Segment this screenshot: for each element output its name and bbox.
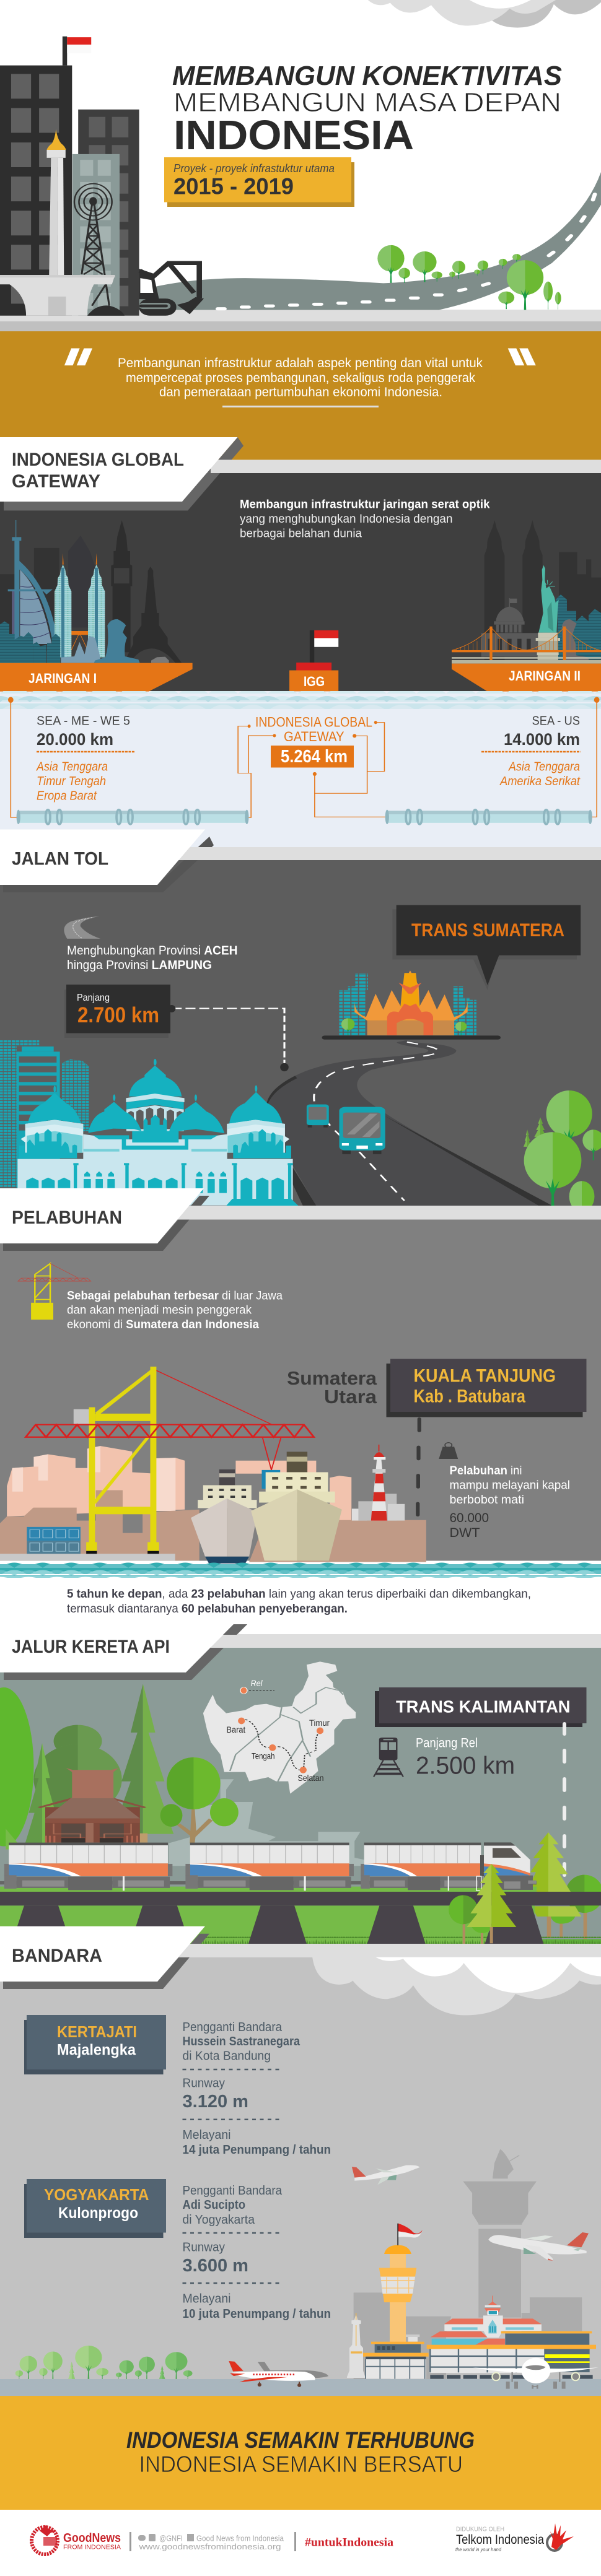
illustration: toll road (266, 1040, 552, 1206)
text: description: Membangun infrastruktur jaringan serat optik (240, 498, 490, 511)
illustration: right skyline (452, 520, 601, 692)
social links: www.goodnewsfromindonesia.org (138, 2542, 281, 2551)
text: SEA-US: SEA - US (532, 715, 580, 728)
panel: Jalur Kereta Api (0, 1616, 601, 1944)
stat box: length (64, 985, 170, 1038)
illustration: undersea pipes (17, 809, 592, 824)
subtitle badge (164, 157, 354, 207)
icon: open quote (64, 349, 92, 365)
connector: dashed line to road (168, 1005, 289, 1071)
logo: GoodNews from Indonesia: FROM INDONESIA (63, 2544, 121, 2551)
text: SEA-US: Amerika Serikat (499, 775, 581, 788)
text: SEA-US: 14.000 km (504, 730, 580, 749)
illustration: plane taking off (488, 2232, 589, 2261)
text: Indonesia Global Gateway length: GATEWAY (284, 729, 344, 744)
connector: white dashes (563, 1724, 566, 1875)
illustration: Baiturrahman mosque (0, 1040, 299, 1206)
panel: Indonesia Global Gateway (0, 437, 601, 847)
illustration: excavator (139, 263, 204, 316)
text: Yogyakarta details: Pengganti Bandara (182, 2184, 283, 2198)
divider (129, 2532, 131, 2551)
heading tab: Pelabuhan (0, 1188, 204, 1243)
info box: Yogyakarta (24, 2179, 166, 2238)
illustration: foreground trees (449, 1864, 516, 1944)
illustration: sea surface (0, 691, 601, 709)
illustration: trees (377, 245, 561, 310)
stat box: length: Panjang (77, 993, 110, 1003)
text: SEA-ME-WE 5: Asia Tenggara (36, 760, 108, 774)
label: Jaringan I: JARINGAN I (29, 671, 97, 686)
label: Jaringan II: JARINGAN II (509, 668, 581, 684)
heading tab: Indonesia Global Gateway: GATEWAY (12, 471, 100, 492)
label: Sumatera Utara (287, 1367, 377, 1408)
title: INDONESIA (173, 112, 414, 159)
callout: Kuala Tanjung (387, 1359, 586, 1417)
text: Kertajati details: Runway (182, 2077, 225, 2091)
heading tab: Jalan Tol: JALAN TOL (12, 848, 108, 869)
illustration: Palembang landmark (322, 970, 501, 1040)
info box: Kertajati (24, 2015, 166, 2074)
info box: Kertajati: Majalengka (57, 2041, 136, 2058)
illustration: plane on runway (229, 2361, 328, 2387)
quote text: Pembangunan infrastruktur adalah aspek penting dan vital untuk (118, 356, 483, 370)
illustration: background control tower and buildings (354, 2149, 582, 2379)
illustration: city buildings and flag (0, 37, 139, 316)
social links (138, 2534, 284, 2551)
text: route line 2: hingga Provinsi LAMPUNG (67, 959, 212, 972)
illustration: track and grass (0, 1887, 601, 1944)
icon: IGG tower with flag: IGG (304, 674, 325, 689)
text: Kertajati details: Melayani (182, 2128, 230, 2142)
panel: closing banner: INDONESIA SEMAKIN TERHUBUNG (126, 2427, 475, 2453)
map labels: Rel (250, 1678, 263, 1688)
text: Indonesia Global Gateway length: INDONESIA GLOBAL (255, 715, 372, 729)
text: Yogyakarta details: Adi Sucipto (182, 2198, 245, 2212)
text: port description: ekonomi di Sumatera dan Indonesia (67, 1318, 259, 1331)
text: five year plan: termasuk diantaranya 60 pelabuhan penyeberangan. (67, 1602, 348, 1616)
panel: Pelabuhan (0, 1188, 601, 1616)
text: DWT capacity: Pelabuhan ini (450, 1464, 522, 1477)
text: DWT capacity: DWT (450, 1526, 480, 1540)
panel: hero header (0, 0, 601, 331)
panel: closing banner: INDONESIA SEMAKIN BERSATU (139, 2452, 463, 2477)
quote text (118, 356, 483, 399)
logo: Telkom Indonesia: the world in your hand (455, 2547, 502, 2552)
icon: small crane (18, 1263, 91, 1320)
text: Yogyakarta details: 3.600 m (182, 2256, 248, 2276)
callout: Trans Sumatera: TRANS SUMATERA (411, 920, 564, 941)
text: SEA-US: Asia Tenggara (508, 760, 580, 774)
map labels: Barat (227, 1725, 245, 1734)
callout: Trans Kalimantan: TRANS KALIMANTAN (396, 1697, 570, 1717)
map labels: Timur (309, 1718, 330, 1728)
illustration: trees behind track (527, 1832, 601, 1939)
illustration: Kalimantan map (203, 1661, 356, 1794)
quote text: dan pemerataan pertumbuhan ekonomi Indonesia. (159, 385, 442, 399)
text: Yogyakarta details: Melayani (182, 2292, 230, 2306)
info box: Yogyakarta: Kulonprogo (58, 2204, 138, 2222)
text: Kertajati details: 3.120 m (182, 2092, 248, 2112)
label: Sumatera Utara: Utara (324, 1386, 377, 1408)
text: DWT capacity (450, 1464, 570, 1540)
divider (294, 2532, 296, 2551)
map labels (227, 1678, 330, 1783)
text: description (240, 498, 490, 540)
text: description: yang menghubungkan Indonesia dengan (240, 513, 452, 526)
illustration: airport terminal and control tower (347, 2224, 596, 2379)
stat: rail length (416, 1736, 515, 1779)
text: SEA-ME-WE 5: SEA - ME - WE 5 (37, 715, 130, 728)
heading tab: Jalur Kereta Api (0, 1616, 247, 1673)
hashtag: #untukIndonesia (305, 2536, 394, 2549)
illustration: telecom tower (74, 184, 112, 306)
text: DWT capacity: mampu melayani kapal (450, 1479, 570, 1492)
quote text: mempercepat proses pembangunan, sekaligus roda penggerak (126, 371, 475, 385)
text: SEA-ME-WE 5: Timur Tengah (37, 775, 106, 788)
subtitle badge: Proyek - proyek infrastuktur utama (173, 162, 335, 175)
social links: @GNFI (159, 2534, 183, 2543)
heading tab: Jalur Kereta Api: JALUR KERETA API (12, 1637, 170, 1657)
text: Yogyakarta details (182, 2184, 331, 2321)
text: SEA-US (481, 715, 581, 788)
heading tab: Indonesia Global Gateway (0, 437, 238, 502)
text: Kertajati details (182, 2021, 331, 2157)
text: Yogyakarta details: 10 juta Penumpang / tahun (182, 2307, 331, 2321)
heading tab: Jalan Tol (0, 830, 205, 885)
title (172, 61, 562, 159)
icon: close quote (508, 349, 536, 365)
logo: GoodNews from Indonesia (32, 2525, 121, 2554)
illustration: forest, house and background silhouettes (0, 1684, 364, 1866)
text: Yogyakarta details: di Yogyakarta (182, 2213, 255, 2227)
illustration: trees right (524, 1090, 601, 1225)
illustration: Monas monument (0, 129, 125, 316)
text: route: Menghubungkan Provinsi ACEH (67, 944, 238, 957)
callout: Trans Sumatera (392, 905, 581, 990)
illustration: small plane in sky (352, 2165, 419, 2185)
illustration: left skyline (0, 520, 193, 692)
text: Yogyakarta details: Runway (182, 2240, 225, 2254)
text: DWT capacity: 60.000 (450, 1511, 489, 1525)
map labels: Selatan (297, 1773, 323, 1783)
illustration: clouds (312, 1957, 601, 2015)
text: SEA-ME-WE 5: Eropa Barat (37, 789, 97, 803)
text: Indonesia Global Gateway length (255, 715, 372, 768)
icon: IGG tower with flag (289, 630, 338, 691)
panel: closing banner (0, 2396, 601, 2510)
illustration: gantry crane (25, 1367, 314, 1554)
text: DWT capacity: berbobot mati (450, 1493, 524, 1507)
callout: Kuala Tanjung: KUALA TANJUNG (414, 1366, 556, 1386)
illustration: low trees (15, 2346, 193, 2379)
panel: intro quote (0, 331, 601, 460)
title: MEMBANGUN KONEKTIVITAS (172, 61, 562, 91)
text: Kertajati details: di Kota Bandung (182, 2050, 271, 2063)
text: five year plan: 5 tahun ke depan, ada 23 pelabuhan lain yang akan terus diperbaiki dan dikembangkan, (67, 1587, 531, 1601)
illustration: clouds (368, 0, 601, 28)
text: SEA-ME-WE 5: 20.000 km (37, 730, 113, 749)
text: five year plan (67, 1587, 531, 1616)
icon: small road (64, 916, 100, 939)
social links: Good News from Indonesia (196, 2534, 284, 2543)
callout: Kuala Tanjung: Kab . Batubara (414, 1386, 525, 1407)
panel: Bandara (0, 1926, 601, 2396)
text: port description: dan akan menjadi mesin penggerak (67, 1303, 252, 1317)
text: SEA-ME-WE 5 (36, 715, 135, 803)
domes (53, 1059, 257, 1110)
illustration: train (0, 1842, 537, 1891)
logo: GoodNews from Indonesia: GoodNews (63, 2531, 121, 2545)
heading tab: Bandara (0, 1926, 205, 1982)
heading tab: Pelabuhan: PELABUHAN (12, 1208, 122, 1228)
map labels: Tengah (252, 1751, 275, 1761)
title: MEMBANGUN MASA DEPAN (173, 87, 561, 118)
illustration: sea (0, 1560, 601, 1579)
text: Kertajati details: Pengganti Bandara (182, 2021, 283, 2034)
text: Indonesia Global Gateway length: 5.264 km (281, 747, 348, 767)
logo: Telkom Indonesia: DIDUKUNG OLEH (456, 2526, 504, 2533)
callout: Trans Kalimantan (375, 1687, 586, 1727)
heading tab: Bandara: BANDARA (12, 1946, 102, 1966)
logo: Telkom Indonesia (455, 2523, 574, 2552)
panel: Jalan Tol (0, 830, 601, 1225)
text: Kertajati details: Hussein Sastranegara (182, 2035, 300, 2048)
stat: rail length: Panjang Rel (416, 1736, 478, 1751)
subtitle badge: 2015 - 2019 (173, 173, 294, 199)
connector: dashed line (418, 1419, 419, 1515)
panel: footer (0, 2510, 601, 2576)
logo: Telkom Indonesia: Telkom Indonesia (456, 2533, 544, 2547)
icon: train on rails (374, 1738, 403, 1777)
stat box: length: 2.700 km (77, 1003, 159, 1027)
label: Sumatera Utara: Sumatera (287, 1367, 377, 1389)
illustration: road and ground (0, 172, 601, 331)
text: port description: Sebagai pelabuhan terbesar di luar Jawa (67, 1289, 283, 1303)
illustration: port scene (0, 1409, 426, 1564)
icon: weight (439, 1443, 458, 1459)
illustration: buses (307, 1105, 385, 1154)
chart: cable connector lines (8, 697, 599, 817)
text: Kertajati details: 14 juta Penumpang / tahun (182, 2143, 331, 2157)
illustration: runway (0, 2379, 601, 2396)
text: port description (67, 1289, 283, 1331)
illustration: front view plane (473, 2358, 599, 2389)
info box: Kertajati: KERTAJATI (57, 2022, 137, 2041)
heading tab: Indonesia Global Gateway: INDONESIA GLOBAL (12, 450, 184, 470)
info box: Yogyakarta: YOGYAKARTA (44, 2185, 149, 2204)
text: description: berbagai belahan dunia (240, 528, 362, 540)
stat: rail length: 2.500 km (416, 1752, 515, 1779)
